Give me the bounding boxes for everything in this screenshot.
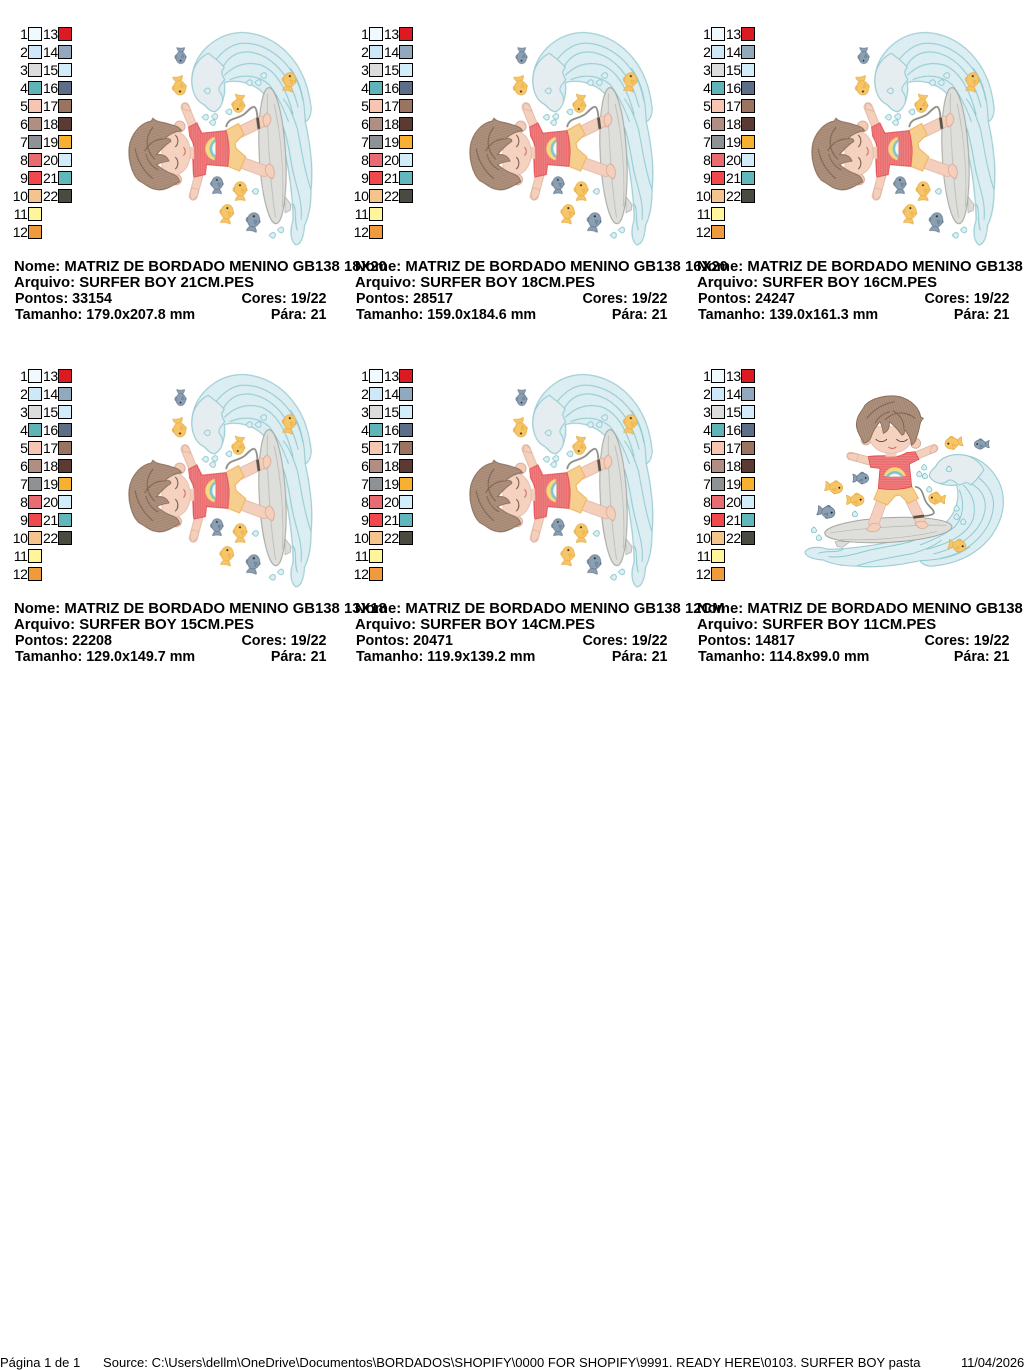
thread colour legend <box>696 368 755 582</box>
thread colour legend: 5 <box>361 440 368 456</box>
design details text: Pontos: 14817 <box>698 633 795 649</box>
thread colour legend: 5 <box>20 440 28 456</box>
thread colour legend: 11 <box>697 206 710 222</box>
thread colour legend: 18 <box>43 458 58 474</box>
thread colour legend: 8 <box>20 152 28 168</box>
thread colour legend: 9 <box>20 512 28 528</box>
design details text <box>697 601 1023 665</box>
thread colour legend: 2 <box>20 386 28 402</box>
thread colour legend: 20 <box>43 152 58 168</box>
thread colour legend: 1 <box>703 26 710 42</box>
thread colour legend: 6 <box>20 458 28 474</box>
thread colour legend: 20 <box>43 494 58 510</box>
thread colour legend: 1 <box>361 368 368 384</box>
thread colour legend: 6 <box>361 458 368 474</box>
design details text: Pára: 21 <box>954 649 1010 665</box>
design details text: Tamanho: 179.0x207.8 mm <box>15 307 195 323</box>
design details text: Arquivo: SURFER BOY 16CM.PES <box>697 275 937 291</box>
design details text: Pontos: 24247 <box>698 291 795 307</box>
thread colour legend: 15 <box>384 62 399 78</box>
design details text: Pontos: 33154 <box>15 291 112 307</box>
thread colour legend: 7 <box>703 134 710 150</box>
thread colour legend: 13 <box>43 26 58 42</box>
thread colour legend: 21 <box>43 170 58 186</box>
thread colour legend: 8 <box>703 152 710 168</box>
thread colour legend <box>354 26 413 240</box>
thread colour legend: 14 <box>384 386 399 402</box>
thread colour legend: 13 <box>726 368 741 384</box>
thread colour legend: 3 <box>20 62 28 78</box>
thread colour legend: 17 <box>384 440 399 456</box>
thread colour legend: 9 <box>361 170 368 186</box>
thread colour legend: 5 <box>703 440 710 456</box>
design details text: Nome: MATRIZ DE BORDADO MENINO GB138 12CM <box>355 601 725 617</box>
footer: source path: Source: C:\Users\dellm\OneDrive\Documentos\BORDADOS\SHOPIFY\0000 FOR SHOPIFY\9991. READY HERE\0103. SURFER BOY pasta <box>103 1355 921 1370</box>
design details text: Tamanho: 119.9x139.2 mm <box>356 649 535 665</box>
embroidery design: rotated surfer boy <box>811 32 996 246</box>
thread colour legend: 12 <box>13 566 28 582</box>
design details text: Tamanho: 129.0x149.7 mm <box>15 649 195 665</box>
thread colour legend: 12 <box>696 224 710 240</box>
thread colour legend: 12 <box>354 566 368 582</box>
thread colour legend: 9 <box>703 512 710 528</box>
thread colour legend: 17 <box>43 440 58 456</box>
thread colour legend: 22 <box>43 530 58 546</box>
thread colour legend: 7 <box>703 476 710 492</box>
thread colour legend: 15 <box>726 404 741 420</box>
design details text: Pontos: 20471 <box>356 633 453 649</box>
thread colour legend: 20 <box>384 152 399 168</box>
panel: surfer boy 16cm <box>696 26 1023 323</box>
thread colour legend: 18 <box>726 458 741 474</box>
thread colour legend: 4 <box>361 80 368 96</box>
embroidery design: rotated surfer boy <box>128 32 313 246</box>
thread colour legend: 14 <box>726 386 741 402</box>
thread colour legend: 20 <box>384 494 399 510</box>
thread colour legend: 4 <box>361 422 368 438</box>
thread colour legend: 21 <box>43 512 58 528</box>
thread colour legend: 21 <box>384 512 399 528</box>
thread colour legend <box>13 26 72 240</box>
thread colour legend: 14 <box>726 44 741 60</box>
design details text: Cores: 19/22 <box>582 633 668 649</box>
thread colour legend: 5 <box>20 98 28 114</box>
panel: surfer boy 14cm <box>354 368 725 665</box>
design details text: Cores: 19/22 <box>582 291 668 307</box>
thread colour legend: 10 <box>696 188 710 204</box>
design details text: Arquivo: SURFER BOY 21CM.PES <box>14 275 254 291</box>
thread colour legend: 19 <box>384 476 399 492</box>
thread colour legend: 1 <box>703 368 710 384</box>
design details text <box>355 601 725 665</box>
thread colour legend: 12 <box>696 566 710 582</box>
thread colour legend: 8 <box>361 494 368 510</box>
thread colour legend: 19 <box>43 476 58 492</box>
design details text: Nome: MATRIZ DE BORDADO MENINO GB138 16X20 <box>355 259 728 275</box>
design details text: Cores: 19/22 <box>241 633 326 649</box>
thread colour legend: 18 <box>384 458 399 474</box>
embroidery design: upright surfer boy <box>804 395 1004 568</box>
design details text: Nome: MATRIZ DE BORDADO MENINO GB138 <box>697 601 1023 617</box>
thread colour legend: 7 <box>361 476 368 492</box>
thread colour legend: 12 <box>354 224 368 240</box>
thread colour legend: 16 <box>384 80 399 96</box>
panel: surfer boy 18cm <box>354 26 728 323</box>
thread colour legend: 20 <box>726 494 741 510</box>
thread colour legend: 3 <box>703 404 710 420</box>
thread colour legend: 4 <box>20 80 28 96</box>
thread colour legend: 21 <box>384 170 399 186</box>
thread colour legend: 17 <box>384 98 399 114</box>
thread colour legend: 22 <box>384 188 399 204</box>
design details text: Nome: MATRIZ DE BORDADO MENINO GB138 <box>697 259 1023 275</box>
thread colour legend: 19 <box>726 134 741 150</box>
thread colour legend: 19 <box>726 476 741 492</box>
thread colour legend: 18 <box>43 116 58 132</box>
thread colour legend: 18 <box>384 116 399 132</box>
thread colour legend: 6 <box>20 116 28 132</box>
thread colour legend: 14 <box>43 44 58 60</box>
thread colour legend: 14 <box>43 386 58 402</box>
thread colour legend: 8 <box>703 494 710 510</box>
thread colour legend: 3 <box>20 404 28 420</box>
thread colour legend: 22 <box>726 530 741 546</box>
thread colour legend: 21 <box>726 512 741 528</box>
design details text: Pára: 21 <box>954 307 1010 323</box>
thread colour legend: 16 <box>43 422 58 438</box>
thread colour legend: 11 <box>355 548 368 564</box>
design details text: Pontos: 28517 <box>356 291 453 307</box>
design details text <box>697 259 1023 323</box>
thread colour legend: 8 <box>20 494 28 510</box>
design details text: Tamanho: 139.0x161.3 mm <box>698 307 878 323</box>
panel: surfer boy 21cm <box>13 26 387 323</box>
thread colour legend: 17 <box>43 98 58 114</box>
thread colour legend <box>354 368 413 582</box>
thread colour legend: 11 <box>697 548 710 564</box>
footer: date: 11/04/2026 <box>961 1355 1024 1370</box>
thread colour legend: 3 <box>361 404 368 420</box>
footer: page number: Página 1 de 1 <box>0 1355 80 1370</box>
thread colour legend: 2 <box>20 44 28 60</box>
thread colour legend: 14 <box>384 44 399 60</box>
thread colour legend: 5 <box>361 98 368 114</box>
panel: surfer boy 11cm <box>696 368 1023 665</box>
thread colour legend: 5 <box>703 98 710 114</box>
design details text: Arquivo: SURFER BOY 11CM.PES <box>697 617 936 633</box>
embroidery design: rotated surfer boy <box>469 374 654 588</box>
design details text: Arquivo: SURFER BOY 18CM.PES <box>355 275 595 291</box>
design details text: Pontos: 22208 <box>15 633 112 649</box>
design details text: Arquivo: SURFER BOY 15CM.PES <box>14 617 254 633</box>
thread colour legend: 16 <box>726 80 741 96</box>
thread colour legend: 7 <box>20 476 28 492</box>
thread colour legend: 4 <box>703 422 710 438</box>
design details text: Tamanho: 159.0x184.6 mm <box>356 307 536 323</box>
design details text: Arquivo: SURFER BOY 14CM.PES <box>355 617 595 633</box>
thread colour legend: 4 <box>20 422 28 438</box>
thread colour legend: 16 <box>43 80 58 96</box>
design details text: Tamanho: 114.8x99.0 mm <box>698 649 869 665</box>
thread colour legend: 19 <box>384 134 399 150</box>
thread colour legend: 6 <box>361 116 368 132</box>
thread colour legend: 10 <box>354 530 368 546</box>
thread colour legend: 22 <box>726 188 741 204</box>
thread colour legend: 9 <box>361 512 368 528</box>
thread colour legend: 20 <box>726 152 741 168</box>
design details text: Pára: 21 <box>271 649 326 665</box>
thread colour legend: 9 <box>20 170 28 186</box>
design details text: Cores: 19/22 <box>241 291 326 307</box>
thread colour legend: 10 <box>696 530 710 546</box>
thread colour legend: 6 <box>703 116 710 132</box>
thread colour legend: 16 <box>726 422 741 438</box>
thread colour legend: 7 <box>20 134 28 150</box>
design details text: Cores: 19/22 <box>924 291 1010 307</box>
panel: surfer boy 15cm <box>13 368 387 665</box>
thread colour legend: 2 <box>703 386 710 402</box>
thread colour legend: 16 <box>384 422 399 438</box>
thread colour legend: 7 <box>361 134 368 150</box>
thread colour legend: 2 <box>361 44 368 60</box>
thread colour legend: 6 <box>703 458 710 474</box>
design details text: Pára: 21 <box>271 307 326 323</box>
design details text: Cores: 19/22 <box>924 633 1010 649</box>
thread colour legend: 4 <box>703 80 710 96</box>
thread colour legend: 11 <box>14 548 28 564</box>
thread colour legend: 15 <box>726 62 741 78</box>
thread colour legend: 13 <box>43 368 58 384</box>
thread colour legend: 15 <box>384 404 399 420</box>
thread colour legend: 3 <box>361 62 368 78</box>
design details text: Pára: 21 <box>612 649 668 665</box>
thread colour legend: 22 <box>43 188 58 204</box>
thread colour legend: 17 <box>726 440 741 456</box>
thread colour legend: 13 <box>726 26 741 42</box>
thread colour legend: 15 <box>43 62 58 78</box>
thread colour legend <box>13 368 72 582</box>
thread colour legend: 12 <box>13 224 28 240</box>
thread colour legend: 8 <box>361 152 368 168</box>
thread colour legend: 18 <box>726 116 741 132</box>
thread colour legend: 2 <box>361 386 368 402</box>
thread colour legend: 10 <box>354 188 368 204</box>
design details text <box>14 601 387 665</box>
thread colour legend: 10 <box>13 188 28 204</box>
thread colour legend: 13 <box>384 368 399 384</box>
design details text: Nome: MATRIZ DE BORDADO MENINO GB138 18X20 <box>14 259 387 275</box>
thread colour legend: 15 <box>43 404 58 420</box>
thread colour legend: 11 <box>355 206 368 222</box>
thread colour legend: 17 <box>726 98 741 114</box>
embroidery design: rotated surfer boy <box>469 32 654 246</box>
thread colour legend: 9 <box>703 170 710 186</box>
thread colour legend: 13 <box>384 26 399 42</box>
design details text: Nome: MATRIZ DE BORDADO MENINO GB138 13X18 <box>14 601 387 617</box>
design details text <box>355 259 728 323</box>
design details text: Pára: 21 <box>612 307 668 323</box>
thread colour legend: 19 <box>43 134 58 150</box>
thread colour legend <box>696 26 755 240</box>
thread colour legend: 11 <box>14 206 28 222</box>
thread colour legend: 2 <box>703 44 710 60</box>
thread colour legend: 21 <box>726 170 741 186</box>
design details text <box>14 259 387 323</box>
thread colour legend: 1 <box>20 368 28 384</box>
thread colour legend: 1 <box>20 26 28 42</box>
thread colour legend: 3 <box>703 62 710 78</box>
thread colour legend: 22 <box>384 530 399 546</box>
thread colour legend: 10 <box>13 530 28 546</box>
thread colour legend: 1 <box>361 26 368 42</box>
embroidery design: rotated surfer boy <box>128 374 313 588</box>
